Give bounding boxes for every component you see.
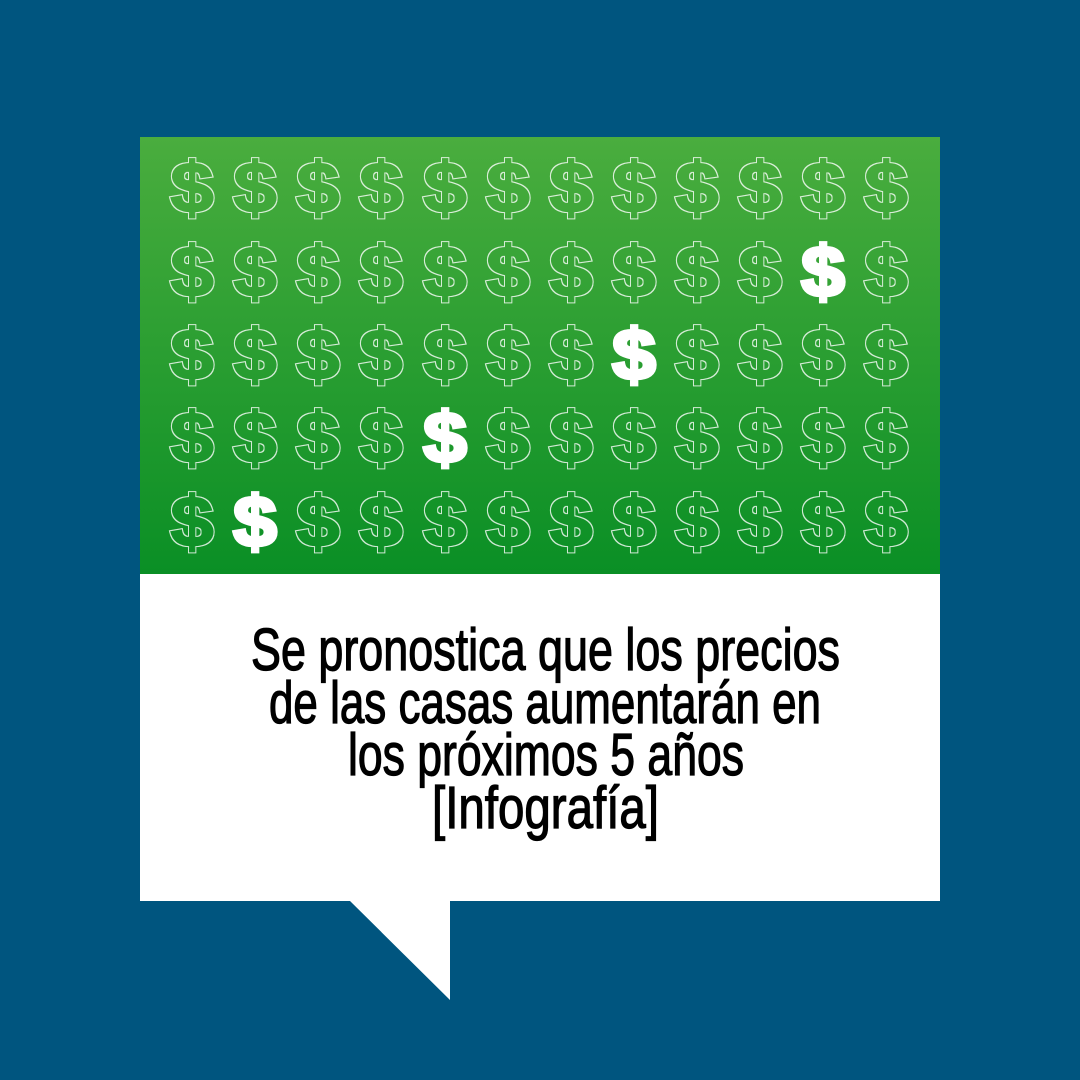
dollar sign outline grid: $ <box>738 147 782 227</box>
dollar sign outline grid: $ <box>738 231 782 311</box>
dollar sign outline grid <box>170 147 908 561</box>
dollar sign outline grid: $ <box>675 231 719 311</box>
dollar sign outline grid: $ <box>170 231 214 311</box>
dollar sign outline grid: $ <box>359 397 403 477</box>
dollar sign outline grid: $ <box>233 314 277 394</box>
dollar sign outline grid: $ <box>486 481 530 561</box>
title: Se pronostica que los precios <box>251 617 840 683</box>
highlighted solid dollar signs: $ <box>233 481 277 561</box>
dollar sign outline grid: $ <box>486 397 530 477</box>
dollar sign outline grid: $ <box>864 147 908 227</box>
dollar sign outline grid: $ <box>486 147 530 227</box>
green panel <box>140 137 940 574</box>
dollar sign outline grid: $ <box>296 481 340 561</box>
title <box>251 617 840 841</box>
dollar sign outline grid: $ <box>296 397 340 477</box>
dollar sign outline grid: $ <box>801 147 845 227</box>
dollar sign outline grid: $ <box>738 314 782 394</box>
title: de las casas aumentarán en <box>269 670 821 736</box>
dollar sign outline grid: $ <box>296 147 340 227</box>
dollar sign outline grid: $ <box>296 314 340 394</box>
dollar sign outline grid: $ <box>612 231 656 311</box>
dollar sign outline grid: $ <box>170 147 214 227</box>
dollar sign outline grid: $ <box>612 481 656 561</box>
dollar sign outline grid: $ <box>549 314 593 394</box>
dollar sign outline grid: $ <box>233 397 277 477</box>
dollar sign outline grid: $ <box>549 481 593 561</box>
title: los próximos 5 años <box>348 722 744 788</box>
dollar sign outline grid: $ <box>675 397 719 477</box>
dollar sign outline grid: $ <box>359 481 403 561</box>
dollar sign outline grid: $ <box>486 314 530 394</box>
dollar sign outline grid: $ <box>359 231 403 311</box>
speech bubble panel <box>140 137 940 1000</box>
dollar sign outline grid: $ <box>486 231 530 311</box>
dollar sign outline grid: $ <box>423 481 467 561</box>
dollar sign outline grid: $ <box>612 397 656 477</box>
dollar sign outline grid: $ <box>233 231 277 311</box>
highlighted solid dollar signs: $ <box>801 231 845 311</box>
dollar sign outline grid: $ <box>423 314 467 394</box>
title: [Infografía] <box>432 775 659 841</box>
dollar sign outline grid: $ <box>675 147 719 227</box>
dollar sign outline grid: $ <box>549 231 593 311</box>
dollar sign outline grid: $ <box>296 231 340 311</box>
highlighted solid dollar signs: $ <box>612 314 656 394</box>
dollar sign outline grid: $ <box>864 397 908 477</box>
dollar sign outline grid: $ <box>170 397 214 477</box>
dollar sign outline grid: $ <box>549 397 593 477</box>
dollar sign outline grid: $ <box>738 481 782 561</box>
dollar sign outline grid: $ <box>170 314 214 394</box>
highlighted solid dollar signs: $ <box>423 397 467 477</box>
dollar sign outline grid: $ <box>233 147 277 227</box>
dollar sign outline grid: $ <box>423 147 467 227</box>
dollar sign outline grid: $ <box>738 397 782 477</box>
dollar sign outline grid: $ <box>675 481 719 561</box>
dollar sign outline grid: $ <box>359 314 403 394</box>
dollar sign outline grid: $ <box>801 481 845 561</box>
dollar sign outline grid: $ <box>864 231 908 311</box>
dollar sign outline grid: $ <box>170 481 214 561</box>
dollar sign outline grid: $ <box>801 397 845 477</box>
dollar sign outline grid: $ <box>612 147 656 227</box>
dollar sign outline grid: $ <box>549 147 593 227</box>
dollar sign outline grid: $ <box>675 314 719 394</box>
dollar sign outline grid: $ <box>359 147 403 227</box>
dollar sign outline grid: $ <box>864 314 908 394</box>
dollar sign outline grid: $ <box>801 314 845 394</box>
dollar sign outline grid: $ <box>864 481 908 561</box>
highlighted solid dollar signs <box>233 231 845 561</box>
bubble body <box>140 574 940 1000</box>
dollar sign outline grid: $ <box>423 231 467 311</box>
